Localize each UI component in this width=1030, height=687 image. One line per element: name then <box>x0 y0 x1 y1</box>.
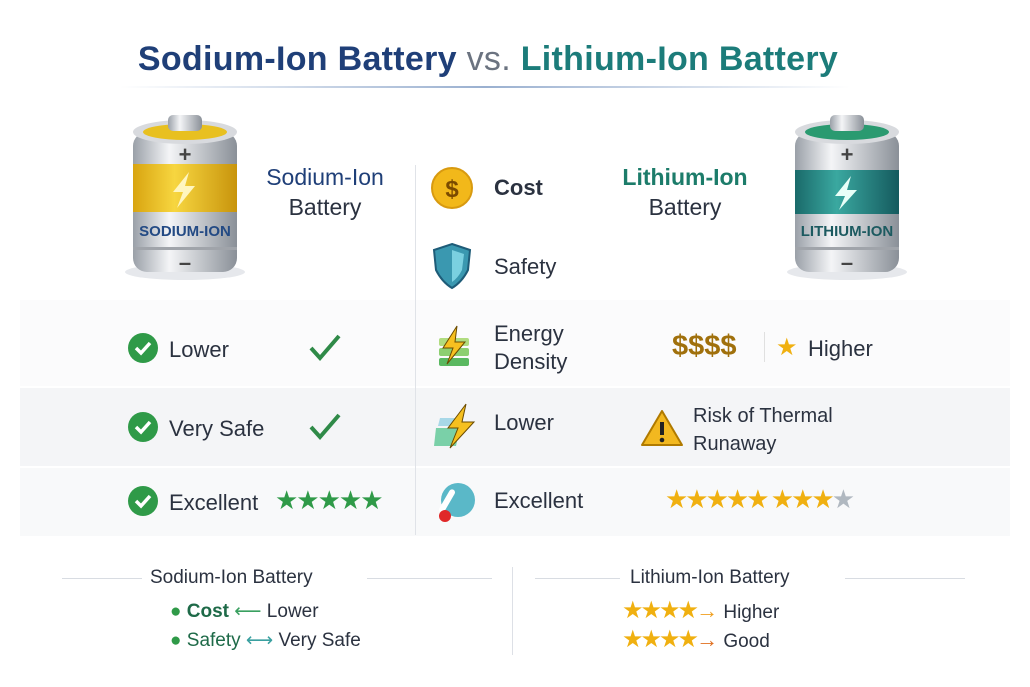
icon: sodium battery <box>125 115 245 280</box>
summary: sodium <box>62 567 492 651</box>
lithium value: cost <box>672 330 873 362</box>
criterion: temperature: Excellent <box>494 488 583 513</box>
sodium heading: Battery <box>289 194 361 220</box>
criterion: cost: Cost <box>494 175 543 200</box>
criterion: safety: Safety <box>494 254 556 279</box>
sodium value: temperature: ★★★★★ <box>275 485 382 515</box>
sodium value: temperature <box>128 485 382 516</box>
criterion: temperature <box>439 483 584 522</box>
lithium value: cost: Higher <box>808 336 873 361</box>
title: Sodium-Ion Battery vs. Lithium-Ion Battery <box>138 40 838 78</box>
criterion: energy density: Energy <box>494 321 564 346</box>
lithium value: thermal runaway: Risk of Thermal <box>693 405 833 427</box>
sodium heading <box>266 164 384 220</box>
lithium value: thermal runaway: Runaway <box>693 433 776 455</box>
summary: lithium: ★★★★→ Good <box>622 626 770 653</box>
icon: lithium battery: LITHIUM-ION <box>801 223 893 240</box>
lithium heading: Battery <box>649 194 721 220</box>
lithium heading: Lithium-Ion <box>622 164 748 190</box>
icon: lithium battery: + <box>841 142 853 167</box>
lithium heading <box>622 164 748 220</box>
criterion: energy density <box>439 321 568 374</box>
icon: sodium battery: SODIUM-ION <box>139 223 231 240</box>
summary: lithium <box>535 567 965 653</box>
lithium value: stars: ★★★★★ ★★★★ <box>665 484 852 514</box>
criterion: safety <box>432 243 556 290</box>
summary: lithium: Lithium-Ion Battery <box>630 567 789 588</box>
icon: sodium battery: + <box>179 142 191 167</box>
criterion: lower: Lower <box>494 410 554 435</box>
sodium value: cost: Lower <box>169 337 229 362</box>
icon: lithium battery <box>787 115 907 280</box>
icon: lithium battery: – <box>841 250 853 275</box>
sodium heading: Sodium-Ion <box>266 164 384 190</box>
sodium value: safety <box>128 412 340 442</box>
sodium value: temperature: Excellent <box>169 490 258 515</box>
lithium value: thermal runaway <box>641 405 833 455</box>
summary: sodium: Sodium-Ion Battery <box>150 567 313 588</box>
icon: sodium battery: – <box>179 250 191 275</box>
sodium value: safety: Very Safe <box>169 416 264 441</box>
lithium value: cost: ★ <box>776 334 798 361</box>
lithium value: cost: $$$$ <box>672 330 737 362</box>
summary: sodium: ● Cost ⟵ Lower <box>170 601 319 622</box>
criterion: energy density: Density <box>494 349 567 374</box>
criterion: cost <box>431 167 543 209</box>
criterion: cost: $ <box>445 176 459 203</box>
summary: sodium: ● Safety ⟷ Very Safe <box>170 630 361 651</box>
summary: lithium: ★★★★→ Higher <box>622 597 779 624</box>
criterion: lower <box>434 404 554 448</box>
sodium value: cost <box>128 333 340 363</box>
